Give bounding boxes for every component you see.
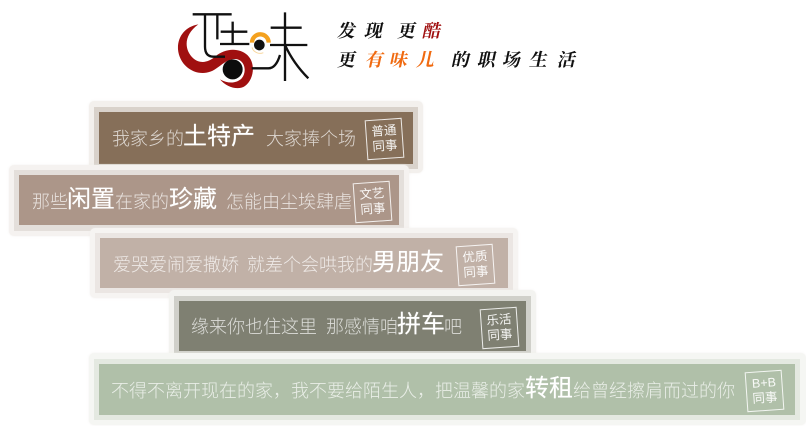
panel: 优质同事: 爱哭爱闹爱撒娇 [113, 255, 239, 275]
panel: 文艺同事: 那些 [32, 192, 68, 212]
panel: 普通同事: 同事 [372, 138, 398, 154]
panel: B+B同事: 转租 [525, 375, 573, 402]
panel: 普通同事: 普通 [371, 123, 397, 139]
tagline: 更 [336, 50, 358, 70]
tagline: 的 [450, 50, 472, 70]
tagline: 生 [528, 50, 550, 70]
panel: B+B同事: B+B [751, 375, 776, 391]
panel: 文艺同事: 文艺 [359, 186, 385, 202]
panel: 乐活同事: 缘来你也住这里 [191, 317, 317, 337]
panel: B+B同事: 给曾经擦肩而过的你 [573, 381, 735, 401]
panel: 优质同事: 同事 [463, 264, 489, 280]
panel: 乐活同事: 同事 [487, 327, 513, 343]
panel: 普通同事: 大家捧个场 [266, 129, 356, 149]
panel: 文艺同事: 在家的 [115, 192, 169, 212]
panel: 优质同事: 男朋友 [372, 249, 444, 276]
tagline: 场 [501, 50, 523, 70]
panel: 文艺同事: 怎能由尘埃肆虐 [226, 192, 352, 212]
tagline: 有 [364, 50, 386, 70]
tagline: 味 [388, 50, 410, 70]
tagline: 儿 [415, 50, 437, 70]
tagline: 发 [336, 21, 358, 41]
tagline: 现 [363, 21, 385, 41]
panel: 文艺同事: 同事 [360, 201, 386, 217]
panel: 乐活同事: 那感情咱 [326, 317, 398, 337]
panel: 乐活同事: 吧 [444, 317, 462, 337]
panel: B+B同事: 同事 [752, 390, 778, 406]
logo [178, 12, 310, 88]
tagline: 更 [396, 21, 418, 41]
panel: 普通同事: 土特产 [183, 123, 255, 150]
tagline: 活 [556, 50, 578, 70]
panel: B+B同事: 不得不离开现在的家，我不要给陌生人，把温馨的家 [111, 381, 525, 401]
panel: 优质同事: 优质 [462, 249, 488, 265]
panel: 乐活同事: 拼车 [397, 311, 445, 338]
panel: 文艺同事: 闲置 [67, 186, 115, 213]
panel: 乐活同事: 乐活 [486, 312, 512, 328]
panel: 优质同事: 就差个会哄我的 [247, 255, 373, 275]
tagline: 职 [476, 50, 498, 70]
tagline [336, 21, 578, 70]
tagline: 酷 [421, 21, 443, 41]
panel: 文艺同事: 珍藏 [169, 186, 217, 213]
panel: 普通同事: 我家乡的 [112, 129, 184, 149]
